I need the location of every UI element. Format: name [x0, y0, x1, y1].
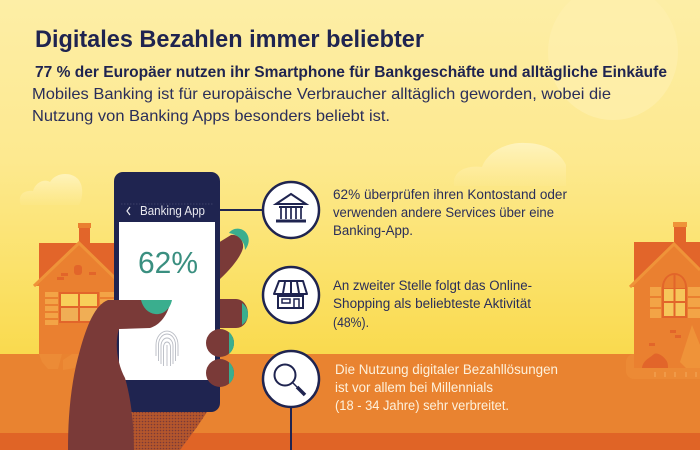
hand shadow on ground [132, 412, 207, 450]
finger 4 nail [229, 362, 234, 384]
connector line: search icon downward [290, 405, 292, 450]
text block: banking app: 62% überprüfen ihren Kontostand oder [333, 187, 567, 202]
text block: millennials: Die Nutzung digitaler Bezahllösungen [335, 362, 558, 377]
finger 4 [206, 359, 234, 387]
text block: millennials: (18 - 34 Jahre) sehr verbreitet. [335, 398, 509, 413]
intro text: Nutzung von Banking Apps besonders beliebt ist. [32, 108, 390, 125]
house left [34, 223, 119, 370]
sun [548, 0, 678, 120]
finger 3 [206, 329, 234, 357]
ground stripe [0, 433, 700, 450]
cloud right [454, 143, 566, 186]
text block: online shopping [333, 278, 532, 330]
percentage 62%: 62% [138, 245, 198, 280]
phone header label: Banking App [140, 204, 205, 218]
house right [626, 222, 700, 379]
intro text: Mobiles Banking ist für europäische Verbraucher alltäglich geworden, wobei die [32, 86, 611, 103]
icon: fingerprint [156, 331, 178, 366]
finger 2 nail [242, 303, 248, 325]
finger 2 [220, 299, 248, 328]
connector line: phone to bank icon [218, 209, 264, 211]
text block: banking app: Banking-App. [333, 223, 413, 238]
subtitle: 77 % der Europäer nutzen ihr Smartphone für Bankgeschäfte und alltägliche Einkäufe [35, 64, 667, 81]
icon: bank [263, 182, 319, 238]
cloud left [20, 174, 82, 205]
title: Digitales Bezahlen immer beliebter [35, 26, 424, 53]
thumb nail [141, 300, 172, 314]
text block: banking app [333, 187, 567, 238]
text block: online shopping: (48%). [333, 315, 369, 330]
phone screen [119, 222, 215, 380]
text block: millennials: ist vor allem bei Millennials [335, 380, 493, 395]
intro text [32, 86, 611, 125]
icon: shop [263, 267, 319, 323]
sky background [0, 0, 700, 354]
finger behind phone [218, 235, 243, 279]
text block: banking app: verwenden andere Services über eine [333, 205, 554, 220]
phone [114, 172, 220, 412]
text block: millennials [335, 362, 558, 413]
text block: online shopping: Shopping als beliebteste Aktivität [333, 296, 531, 311]
icon: magnifier [263, 351, 319, 407]
hand [68, 229, 249, 450]
ground [0, 354, 700, 433]
finger: upper nail [229, 229, 249, 250]
finger 3 nail [229, 332, 234, 354]
text block: online shopping: An zweiter Stelle folgt das Online- [333, 278, 532, 293]
